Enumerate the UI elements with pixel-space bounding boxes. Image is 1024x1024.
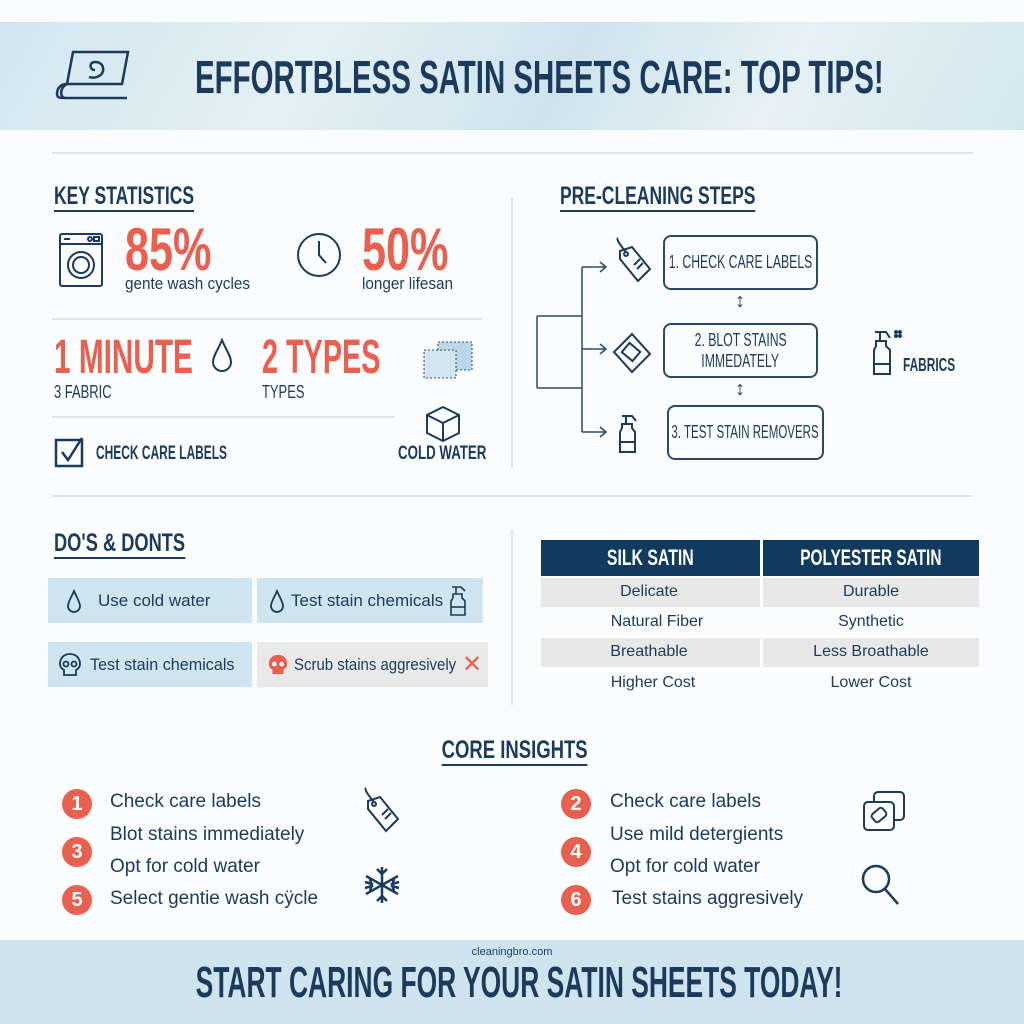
step 2: 2. BLOT STAINS <box>694 330 787 350</box>
comparison table: SILK SATIN <box>607 545 694 570</box>
step 1: 1. CHECK CARE LABELS <box>669 252 812 272</box>
icon: cube <box>426 406 460 442</box>
core insights heading: CORE INSIGHTS <box>442 736 588 764</box>
core insights right list: 6 <box>570 888 582 910</box>
stat 85%: 85% <box>125 216 211 283</box>
arrow: ↕ <box>735 290 745 312</box>
panel: pre-cleaning steps: FABRICS <box>903 355 955 375</box>
core insights left list: Select gentie wash cÿcle <box>110 888 318 909</box>
core insights right list: Test stains aggresively <box>612 888 803 909</box>
comparison table: Higher Cost <box>611 674 695 691</box>
footer headline: START CARING FOR YOUR SATIN SHEETS TODAY! <box>196 958 842 1007</box>
core insights left list: Opt for cold water <box>110 856 260 877</box>
core insights left list: Check care labels <box>110 791 261 812</box>
stat 1 minute: 1 MINUTE <box>54 331 193 384</box>
do: test stain <box>257 578 483 623</box>
dont: test stain: Test stain chemicals <box>90 654 235 674</box>
step 3: 3. TEST STAIN REMOVERS <box>672 422 819 442</box>
comparison table <box>541 540 979 691</box>
comparison table: Less Broathable <box>813 643 929 660</box>
do: cold water <box>48 578 252 623</box>
comparison table: Lower Cost <box>831 674 911 691</box>
do: cold water: Use cold water <box>98 590 210 610</box>
icon: drop <box>212 338 232 372</box>
header band <box>0 22 1024 130</box>
comparison table: Delicate <box>620 583 678 600</box>
step 2 <box>663 323 818 378</box>
core insights left list: 5 <box>71 888 83 910</box>
heading: DO'S & DONTS <box>54 529 185 557</box>
core insights right list: Check care labels <box>610 791 761 812</box>
core insights right list: 4 <box>570 840 582 862</box>
comparison table: Natural Fiber <box>611 613 703 630</box>
icon: snowflake <box>364 867 400 903</box>
arrow: ↕ <box>735 378 745 400</box>
icon: fabric swatches <box>424 342 472 378</box>
panel: key statistics: TYPES <box>262 382 305 402</box>
icon: magnifier <box>862 864 899 905</box>
core insights left list: Blot stains immediately <box>110 824 304 845</box>
comparison table: Breathable <box>610 643 688 660</box>
comparison table: Durable <box>843 583 899 600</box>
panel: key statistics: CHECK CARE LABELS <box>96 443 227 464</box>
icon: tag <box>616 237 652 282</box>
core insights right list: 2 <box>570 792 582 814</box>
icon: spray fabrics <box>873 330 902 375</box>
footer band <box>0 940 1024 1024</box>
title: EFFORTBLESS SATIN SHEETS CARE: TOP TIPS! <box>195 51 884 103</box>
stat 2 types: 2 TYPES <box>262 331 380 384</box>
icon: checkbox <box>54 437 84 468</box>
core insights right list: Opt for cold water <box>610 856 760 877</box>
core insights left list: 1 <box>71 792 83 814</box>
core insights left list: 3 <box>71 840 83 862</box>
do: test stain: Test stain chemicals <box>291 590 443 610</box>
dont: scrub <box>257 642 488 687</box>
step 3 <box>667 405 824 460</box>
step 2: IMMEDATELY <box>702 350 779 370</box>
icon: detergent pads <box>863 791 905 831</box>
icon: spray bottle <box>619 415 637 453</box>
step 1 <box>663 235 818 290</box>
panel: key statistics: gente wash cycles <box>125 274 250 293</box>
panel: dos and donts <box>48 529 488 687</box>
panel: key statistics: longer lifesan <box>362 274 453 293</box>
dont: scrub: Scrub stains aggresively <box>294 654 456 674</box>
connector arrows <box>536 262 608 438</box>
core insights right list: Use mild detergients <box>610 824 783 845</box>
core insights right list <box>561 789 905 915</box>
heading: KEY STATISTICS <box>54 182 194 210</box>
icon: tag <box>364 787 400 832</box>
comparison table: Synthetic <box>838 613 904 630</box>
core insights left list <box>62 787 400 915</box>
icon: clock <box>297 233 341 277</box>
panel: pre-cleaning steps <box>536 182 955 460</box>
dont: scrub: ✕ <box>462 651 482 678</box>
icon: washing machine <box>59 233 103 287</box>
panel: key statistics <box>52 182 486 468</box>
panel: key statistics: 3 FABRIC <box>54 382 112 402</box>
stat 50%: 50% <box>362 216 448 283</box>
panel: key statistics: COLD WATER <box>398 443 486 464</box>
footer band: cleaningbro.com <box>472 946 552 958</box>
comparison table: POLYESTER SATIN <box>800 545 942 570</box>
icon: stain pad <box>612 332 652 374</box>
heading: PRE-CLEANING STEPS <box>560 182 755 210</box>
dont: test stain <box>48 642 252 687</box>
icon: folded sheet <box>56 50 130 100</box>
